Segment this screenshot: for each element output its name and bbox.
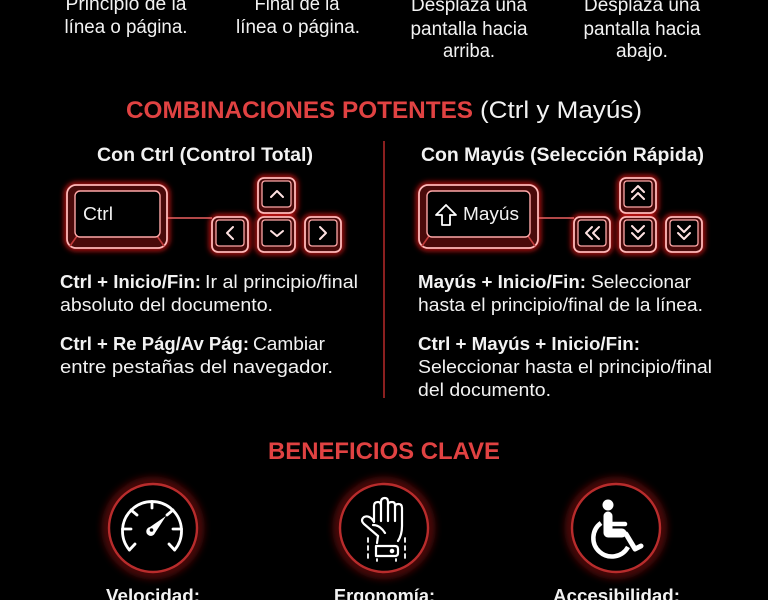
key: shift right bbox=[666, 217, 702, 252]
key: shift up bbox=[620, 178, 656, 213]
text block: ctrl mayus inicio fin bbox=[418, 333, 712, 400]
text block: mayus inicio fin: Mayús + Inicio/Fin: bbox=[418, 271, 586, 292]
text block: inicio description bbox=[64, 0, 188, 38]
text block: fin description: línea o página. bbox=[236, 17, 360, 38]
key: ctrl bbox=[67, 185, 167, 248]
key: arrow down bbox=[258, 217, 295, 252]
heading: con ctrl: Con Ctrl (Control Total) bbox=[97, 145, 313, 166]
key: shift down bbox=[620, 217, 656, 252]
key: mayus bbox=[419, 185, 538, 248]
text block: av pag description: pantalla hacia bbox=[584, 19, 701, 40]
benefit: velocidad bbox=[106, 482, 200, 600]
text block: ctrl mayus inicio fin: Seleccionar hasta el principio/final bbox=[418, 356, 712, 377]
icon: speedometer bbox=[107, 482, 199, 574]
text block: ctrl mayus inicio fin: Ctrl + Mayús + Inicio/Fin: bbox=[418, 333, 640, 354]
heading: beneficios clave: BENEFICIOS CLAVE bbox=[268, 438, 500, 465]
benefit: accesibilidad bbox=[553, 482, 680, 600]
text block: re pag description: pantalla hacia bbox=[410, 19, 528, 40]
text block: ctrl inicio fin: Ir al principio/final bbox=[205, 271, 358, 292]
text block: ctrl re pag av pag bbox=[60, 333, 333, 377]
text block: fin description bbox=[236, 0, 360, 38]
key: shift left bbox=[574, 217, 610, 252]
heading: con mayus: Con Mayús (Selección Rápida) bbox=[421, 145, 704, 166]
icon: wheelchair bbox=[570, 482, 662, 574]
diagram: shift key and arrow keys bbox=[419, 178, 702, 252]
text block: re pag description bbox=[410, 0, 528, 62]
icon: hand and wrist bbox=[338, 482, 430, 574]
text block: ctrl inicio fin: Ctrl + Inicio/Fin: bbox=[60, 271, 201, 292]
key: arrow left bbox=[212, 217, 248, 252]
key: arrow up bbox=[258, 178, 295, 213]
panel: con mayus bbox=[418, 145, 712, 400]
key: ctrl: Ctrl bbox=[83, 204, 113, 224]
key: arrow right bbox=[305, 217, 341, 252]
text block: av pag description: abajo. bbox=[616, 41, 668, 62]
diagram: ctrl key and arrow keys bbox=[67, 178, 341, 252]
text block: mayus inicio fin: hasta el principio/final de la línea. bbox=[418, 294, 703, 315]
heading: combinaciones potentes bbox=[126, 97, 642, 124]
text block: ctrl re pag av pag: entre pestañas del navegador. bbox=[60, 356, 333, 377]
text block: re pag description: arriba. bbox=[443, 41, 495, 62]
text block: av pag description bbox=[584, 0, 701, 62]
heading: combinaciones potentes: COMBINACIONES POTENTES bbox=[126, 97, 473, 124]
benefit: ergonomia bbox=[334, 482, 435, 600]
text block: ctrl inicio fin bbox=[60, 271, 358, 315]
key: mayus: Mayús bbox=[463, 204, 519, 224]
text block: mayus inicio fin: Seleccionar bbox=[591, 271, 691, 292]
panel: con ctrl bbox=[60, 145, 358, 377]
text block: mayus inicio fin bbox=[418, 271, 703, 315]
text block: ctrl mayus inicio fin: del documento. bbox=[418, 379, 551, 400]
text block: ctrl re pag av pag: Cambiar bbox=[253, 333, 325, 354]
text block: ctrl re pag av pag: Ctrl + Re Pág/Av Pág: bbox=[60, 333, 249, 354]
text block: ctrl inicio fin: absoluto del documento. bbox=[60, 294, 273, 315]
text block: inicio description: línea o página. bbox=[64, 17, 188, 38]
heading: combinaciones potentes: (Ctrl y Mayús) bbox=[480, 97, 642, 124]
